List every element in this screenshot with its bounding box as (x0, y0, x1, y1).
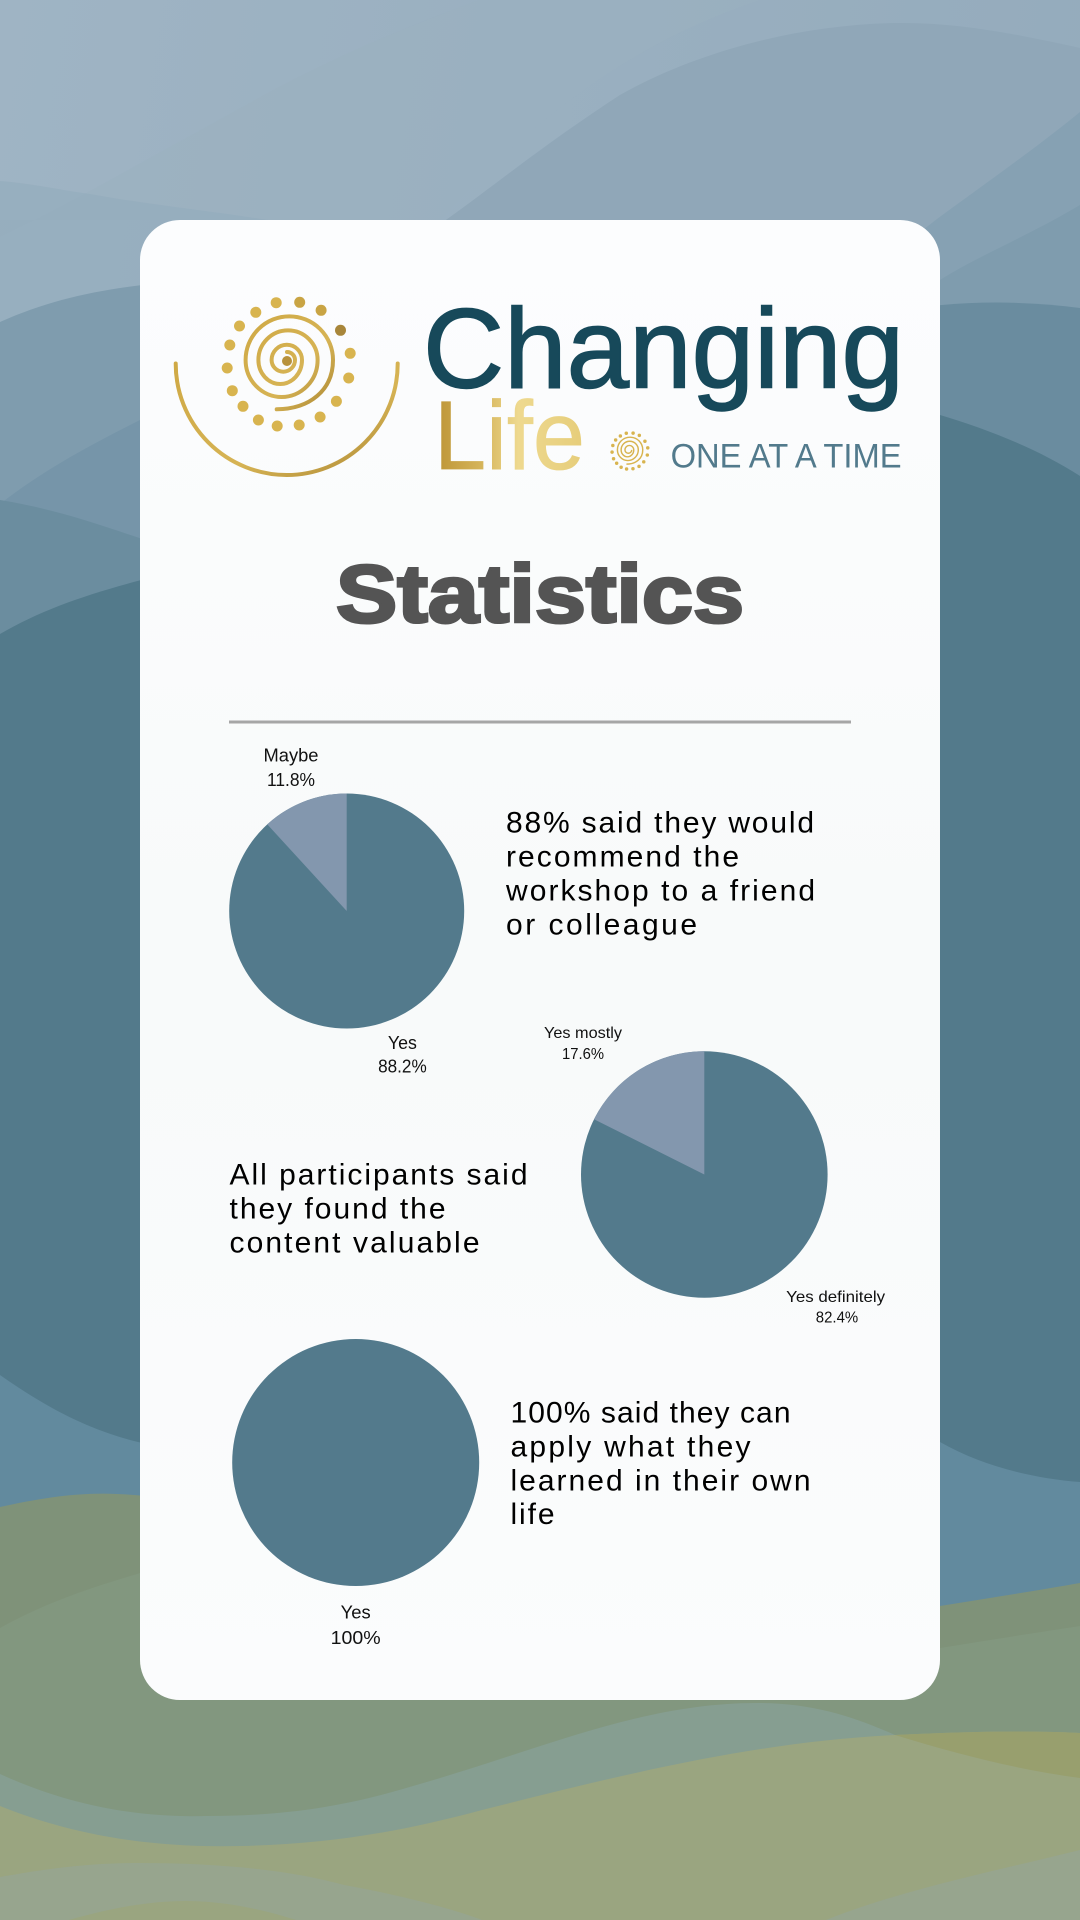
text: 88% would recommend: 88% said they would (506, 807, 814, 840)
icon: gold bowl and spiral (176, 297, 398, 475)
pie chart: valuable (581, 1051, 828, 1298)
label: Yes mostly 17.6%: 17.6% (562, 1046, 604, 1063)
label: Yes definitely 82.4%: 82.4% (816, 1310, 858, 1327)
icon: small spiral (610, 431, 649, 471)
text: content valuable (230, 1158, 528, 1259)
wordmark: Changing: Changing (423, 286, 904, 412)
label: Maybe 11.8%: 11.8% (267, 770, 315, 790)
label: Yes 88.2%: Yes (388, 1033, 417, 1053)
wordmark: Life: Life (434, 381, 585, 490)
label: Maybe 11.8%: Maybe (264, 746, 318, 766)
section: apply statistic (232, 1339, 810, 1648)
text: 88% would recommend: workshop to a friend (505, 875, 815, 908)
text: 88% would recommend: or colleague (506, 908, 697, 942)
section: recommend statistic (229, 746, 815, 1077)
text: can apply: life (510, 1498, 554, 1531)
text: content valuable: All participants said (230, 1158, 528, 1191)
pie chart: recommend (229, 794, 464, 1028)
text: 88% would recommend (505, 807, 815, 942)
tagline: ONE AT A TIME: ONE AT A TIME (671, 437, 902, 475)
label: Yes 88.2% (378, 1033, 427, 1077)
text: can apply (510, 1397, 810, 1531)
label: Yes mostly 17.6%: Yes mostly (544, 1025, 622, 1042)
section: valuable statistic (230, 1025, 885, 1327)
label: Yes 100%: Yes (341, 1603, 371, 1623)
label: Yes mostly 17.6% (544, 1025, 622, 1063)
label: Yes 100%: 100% (331, 1628, 381, 1648)
label: Maybe 11.8% (264, 746, 318, 790)
label: Yes 88.2%: 88.2% (378, 1057, 427, 1077)
text: can apply: 100% said they can (510, 1397, 790, 1430)
label: Yes definitely 82.4%: Yes definitely (786, 1289, 885, 1306)
label: Yes definitely 82.4% (786, 1289, 885, 1327)
logo: Changing Life One at a Time (176, 286, 904, 490)
heading: Statistics: Statistics (336, 549, 744, 640)
panel: white card (140, 220, 940, 1700)
label: Yes 100% (331, 1603, 381, 1648)
text: content valuable: they found the (230, 1192, 446, 1225)
text: can apply: learned in their own (510, 1464, 810, 1497)
text: content valuable: content valuable (230, 1226, 480, 1259)
pie chart: apply (232, 1339, 479, 1586)
text: can apply: apply what they (510, 1430, 750, 1464)
text: 88% would recommend: recommend the (506, 841, 739, 874)
